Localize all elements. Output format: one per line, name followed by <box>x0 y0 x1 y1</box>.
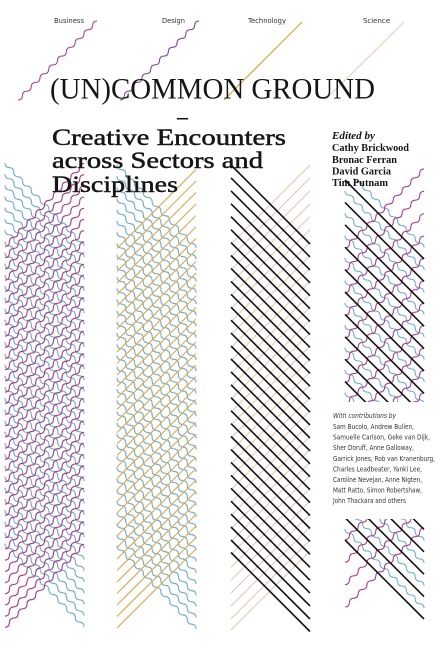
editors: Cathy Brickwood <box>332 142 409 154</box>
category labels: Business <box>54 17 84 25</box>
ribbon: lower right weave <box>344 519 425 620</box>
category key lines <box>17 20 404 101</box>
subtitle: Disciplines <box>52 172 178 198</box>
category labels: Technology <box>247 17 286 25</box>
category labels: Science <box>363 17 390 25</box>
category labels: Design <box>162 17 185 25</box>
editors: Edited by <box>331 130 375 142</box>
subtitle <box>52 125 286 198</box>
category labels <box>54 17 390 25</box>
contributors: With contributions by <box>333 411 397 420</box>
editors: David Garcia <box>332 166 392 178</box>
editors: Bronac Ferran <box>332 154 397 166</box>
contributors: Sam Bucolo, Andrew Bullen, <box>333 422 414 431</box>
contributors: Sher Doruff, Anne Galloway, <box>333 443 414 452</box>
ribbon: upper right weave <box>344 168 425 402</box>
editors <box>331 130 409 189</box>
subtitle: across Sectors and <box>52 148 263 174</box>
dash: – <box>176 104 189 129</box>
ribbon: business and design weave <box>4 162 85 628</box>
ribbon: design and technology weave <box>116 164 197 630</box>
contributors: John Thackara and others <box>332 496 406 505</box>
contributors <box>332 411 435 505</box>
contributors: Matt Ratto, Simon Robertshaw, <box>333 486 422 494</box>
contributors: Caroline Nevejan, Anne Nigten, <box>333 475 422 484</box>
ribbon: technology and science weave <box>231 165 310 632</box>
subtitle: Creative Encounters <box>52 125 286 151</box>
editors: Tim Putnam <box>332 177 388 189</box>
contributors: Charles Leadbeater, Yanki Lee, <box>333 464 422 474</box>
title: (UN)COMMON GROUND <box>50 72 375 106</box>
